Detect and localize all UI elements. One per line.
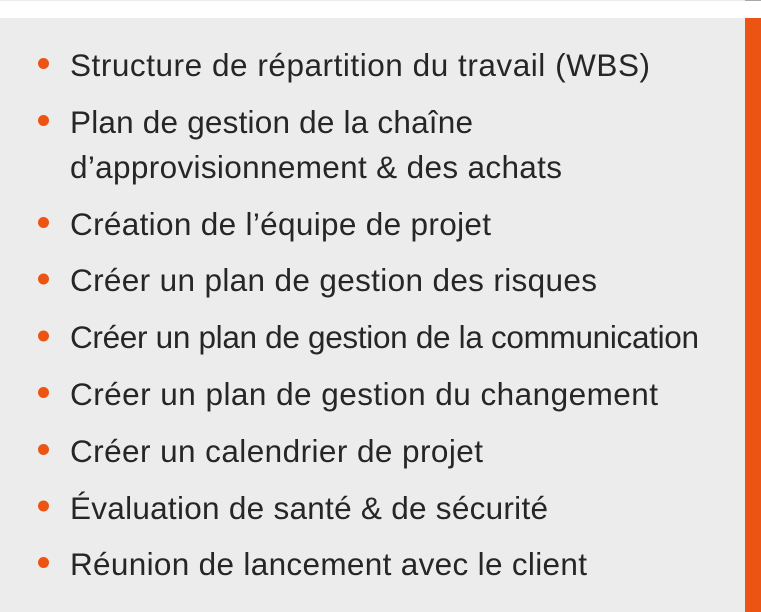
item: supply chain plan: d’approvisionnement & des achats — [70, 149, 562, 185]
item: communication plan: Créer un plan de gestion de la communication — [70, 319, 699, 355]
item: kickoff meeting: Réunion de lancement avec le client — [70, 546, 587, 582]
item: supply chain plan — [38, 104, 562, 185]
top rule — [0, 0, 761, 1]
item: change plan: Créer un plan de gestion du changement — [70, 376, 658, 412]
item: supply chain plan: Plan de gestion de la chaîne — [70, 104, 473, 140]
bullet list — [38, 47, 699, 582]
item: project calendar: Créer un calendrier de projet — [70, 433, 483, 469]
orange side bar — [745, 18, 761, 612]
item: work breakdown structure: Structure de répartition du travail (WBS) — [70, 47, 650, 83]
item: risk plan: Créer un plan de gestion des risques — [70, 262, 597, 298]
item: project team: Création de l’équipe de projet — [70, 206, 491, 242]
item: health and safety: Évaluation de santé & de sécurité — [70, 490, 548, 526]
